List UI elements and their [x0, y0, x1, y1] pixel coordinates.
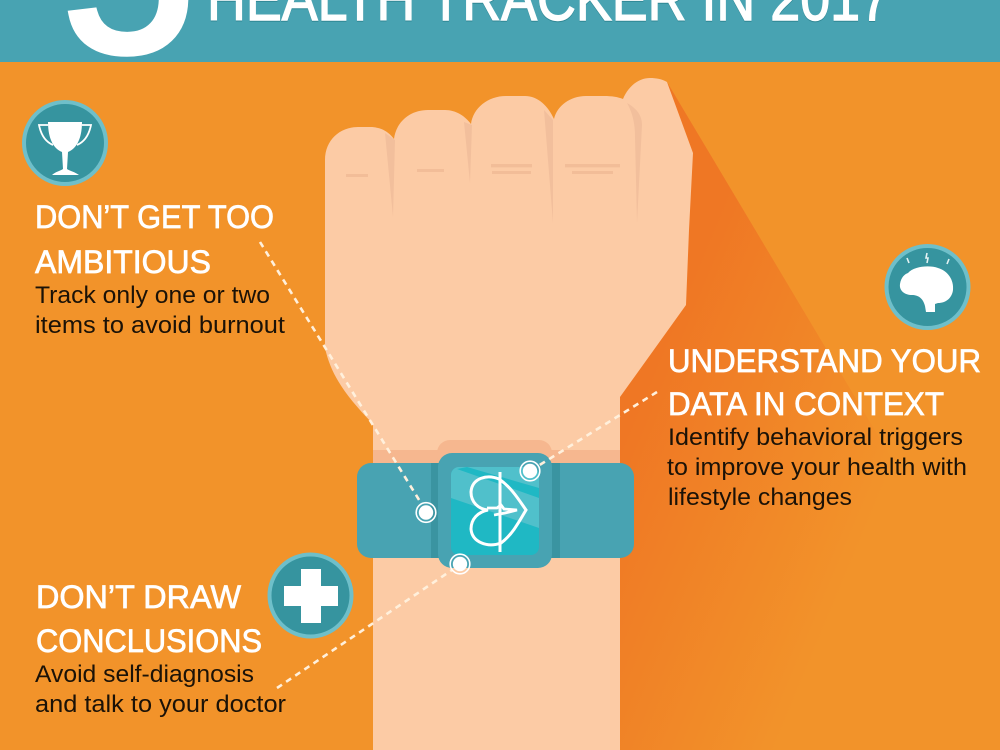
text block: don't draw conclusions [35, 579, 286, 718]
text block: don't get too ambitious: Track only one or two [35, 282, 270, 309]
text block: don't get too ambitious: AMBITIOUS [35, 244, 211, 280]
wrist shading [373, 450, 620, 464]
text block: understand your data in context [667, 343, 981, 511]
fitness tracker [357, 440, 634, 568]
knuckle lines [346, 164, 620, 177]
text block: don't get too ambitious [35, 199, 285, 339]
hand and arm [325, 78, 693, 750]
text block: don't draw conclusions: Avoid self-diagnosis [35, 661, 254, 688]
icon: medical cross [270, 554, 352, 636]
text block: don't draw conclusions: and talk to your doctor [35, 691, 286, 718]
dashed connector: context [538, 392, 657, 466]
watch body [438, 453, 552, 568]
text block: understand your data in context: lifestyle changes [668, 484, 852, 511]
strap [357, 463, 634, 558]
screen glare [451, 467, 539, 528]
finger creases [385, 103, 642, 223]
text block: understand your data in context: UNDERSTAND YOUR [668, 343, 981, 379]
text block: don't draw conclusions: CONCLUSIONS [36, 623, 262, 659]
text block: understand your data in context: to improve your health with [667, 454, 967, 481]
text block: understand your data in context: Identify behavioral triggers [668, 424, 963, 451]
dashed connector: ambitious [260, 242, 421, 503]
glare stripe [457, 467, 539, 498]
marker dots [416, 461, 540, 574]
dashed connector: conclusions [277, 570, 452, 688]
text block: understand your data in context: DATA IN CONTEXT [668, 386, 944, 422]
text block: don't draw conclusions: DON’T DRAW [36, 579, 242, 615]
text block: don't get too ambitious: items to avoid burnout [35, 312, 285, 339]
hand cast shadow [600, 82, 1000, 750]
icon: trophy [24, 102, 106, 184]
text block: don't get too ambitious: DON’T GET TOO [35, 199, 274, 235]
screen [451, 467, 539, 555]
icon: brain [886, 246, 968, 328]
heart icon [471, 472, 526, 552]
header banner [0, 0, 1000, 102]
